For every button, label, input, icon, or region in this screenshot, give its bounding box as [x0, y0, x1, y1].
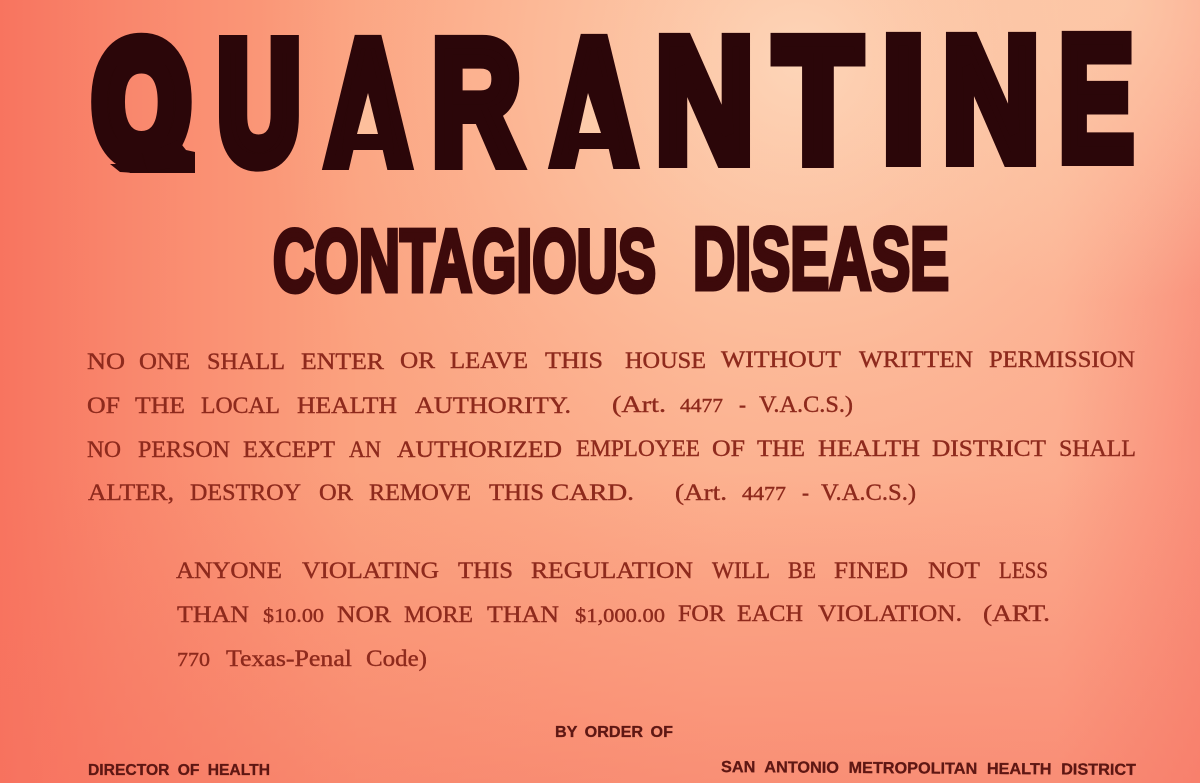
paragraph: fine notice: THIS	[458, 558, 513, 583]
paragraph: fine notice: MORE	[404, 602, 473, 627]
paragraph: fine notice: 770	[177, 649, 210, 671]
paragraph: entry and card rules: OR	[319, 480, 354, 505]
paragraph: entry and card rules: PERSON	[138, 437, 230, 462]
paragraph: entry and card rules: OF	[712, 436, 745, 461]
paragraph: entry and card rules: AUTHORIZED	[397, 437, 562, 462]
signature: director of health: DIRECTOR OF HEALTH	[88, 762, 270, 779]
paragraph: entry and card rules: OR	[400, 348, 436, 373]
paragraph: entry and card rules: EMPLOYEE	[576, 436, 700, 461]
paragraph: entry and card rules: WITHOUT	[721, 347, 841, 372]
subtitle: CONTAGIOUS DISEASE: DISEASE	[693, 209, 949, 308]
paragraph: entry and card rules: THE	[757, 436, 805, 461]
paragraph: fine notice: VIOLATION.	[818, 601, 962, 626]
paragraph: fine notice: (ART.	[983, 601, 1050, 626]
paragraph: entry and card rules: -	[739, 392, 746, 417]
paragraph: entry and card rules: ONE	[139, 349, 190, 374]
title: QUARANTINE: N	[655, 3, 754, 199]
paragraph: fine notice: BE	[788, 558, 816, 583]
paragraph: entry and card rules: AN	[349, 437, 381, 462]
paragraph: entry and card rules: WRITTEN	[859, 347, 973, 372]
paragraph: fine notice: $10.00	[263, 605, 324, 627]
paragraph: fine notice: ANYONE	[176, 558, 282, 583]
paragraph: fine notice: LESS	[999, 558, 1048, 583]
paragraph: fine notice: VIOLATING	[302, 558, 439, 583]
paragraph: entry and card rules: THIS	[545, 348, 603, 373]
paragraph: entry and card rules: HOUSE	[625, 348, 706, 373]
paragraph: fine notice: FOR	[678, 601, 726, 626]
paragraph: entry and card rules: SHALL	[1059, 436, 1136, 461]
paragraph: entry and card rules: THE	[135, 393, 185, 418]
paragraph: fine notice: THAN	[487, 602, 559, 627]
paragraph: entry and card rules: (Art.	[675, 480, 727, 505]
paragraph: entry and card rules	[87, 347, 1136, 505]
paragraph: fine notice	[176, 558, 1050, 671]
paragraph: entry and card rules: CARD.	[551, 480, 634, 505]
paragraph: entry and card rules: SHALL	[207, 349, 285, 374]
paragraph: fine notice: $1,000.00	[575, 605, 665, 627]
paragraph: entry and card rules: V.A.C.S.)	[821, 480, 916, 505]
subtitle: CONTAGIOUS DISEASE: CONTAGIOUS	[273, 211, 656, 310]
title: QUARANTINE: I	[882, 2, 925, 198]
paragraph: entry and card rules: EXCEPT	[243, 437, 335, 462]
paragraph: entry and card rules: THIS	[489, 480, 544, 505]
title: QUARANTINE: Q	[94, 10, 189, 194]
paragraph: entry and card rules: LOCAL	[201, 393, 280, 418]
paragraph: entry and card rules: V.A.C.S.)	[759, 392, 853, 417]
paragraph: fine notice: Texas-Penal	[226, 646, 352, 671]
paragraph: fine notice: NOT	[928, 558, 980, 583]
paragraph: entry and card rules: HEALTH	[297, 393, 397, 418]
paragraph: entry and card rules: DESTROY	[190, 480, 301, 505]
paragraph: entry and card rules: -	[802, 480, 809, 505]
paragraph: entry and card rules: NO	[87, 349, 125, 374]
title: QUARANTINE: U	[218, 8, 300, 198]
title: QUARANTINE: T	[775, 3, 861, 199]
title: QUARANTINE: A	[326, 5, 411, 201]
paragraph: entry and card rules: REMOVE	[369, 480, 471, 505]
paragraph: entry and card rules: LEAVE	[450, 348, 528, 373]
paragraph: fine notice: THAN	[177, 602, 249, 627]
title: QUARANTINE: N	[942, 2, 1040, 198]
by order of: BY ORDER OF	[555, 724, 673, 741]
paragraph: entry and card rules: DISTRICT	[932, 436, 1046, 461]
paragraph: entry and card rules: AUTHORITY.	[415, 393, 571, 418]
signature: health district: SAN ANTONIO METROPOLITAN HEALTH DISTRICT	[721, 759, 1136, 779]
title: QUARANTINE: E	[1059, 1, 1134, 197]
paragraph: entry and card rules: OF	[87, 393, 120, 418]
paragraph: fine notice: WILL	[712, 558, 770, 583]
paragraph: entry and card rules: (Art.	[612, 392, 666, 417]
paragraph: entry and card rules: ALTER,	[88, 480, 174, 505]
paragraph: entry and card rules: NO	[87, 437, 121, 462]
paragraph: fine notice: NOR	[337, 602, 392, 627]
paragraph: fine notice: EACH	[737, 601, 803, 626]
paragraph: entry and card rules: ENTER	[301, 349, 385, 374]
paragraph: fine notice: FINED	[834, 558, 908, 583]
paragraph: fine notice: Code)	[366, 646, 427, 671]
paragraph: fine notice: REGULATION	[531, 558, 693, 583]
paragraph: entry and card rules: 4477	[742, 483, 786, 505]
paragraph: entry and card rules: 4477	[680, 395, 723, 417]
title: QUARANTINE: R	[432, 5, 521, 201]
title: QUARANTINE	[91, 30, 1134, 173]
paragraph: entry and card rules: PERMISSION	[989, 347, 1135, 372]
paragraph: entry and card rules: HEALTH	[818, 436, 920, 461]
title: QUARANTINE: A	[552, 4, 637, 200]
